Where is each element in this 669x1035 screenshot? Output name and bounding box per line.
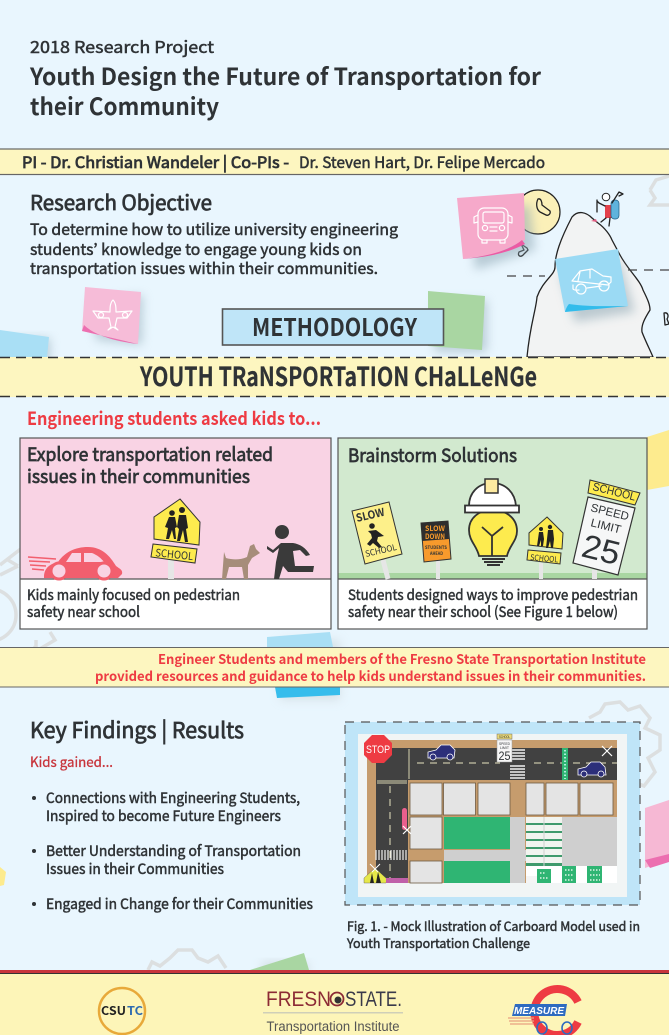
icon: speed sign: SCHOOL (499, 735, 510, 739)
list: key findings: Inspired to become Future Engineers (46, 805, 281, 826)
figure caption (346, 916, 640, 952)
decorative gears and sticky notes (0, 176, 669, 976)
icon: slow down sign: STUDENTS (425, 545, 447, 551)
list: key findings: Connections with Engineering Students, (46, 787, 300, 808)
icon: running child (267, 525, 314, 579)
figure: model map (345, 722, 640, 905)
icon: plane (93, 300, 132, 330)
icon: lightbulb with hard hat (465, 479, 519, 565)
banner: youth transportation challenge: YOUTH TRaNSPORTaTION CHaLLeNGe (139, 357, 537, 394)
list: key findings: Better Understanding of Transportation (46, 840, 301, 861)
icon: red car (28, 547, 122, 579)
panel caption (348, 584, 638, 622)
icon: speed limit sign: LIMIT (589, 517, 622, 536)
icon: car (572, 269, 611, 294)
logo: Fresno State: Transportation Institute (266, 1019, 400, 1034)
title (29, 58, 542, 122)
figure caption: Fig. 1. - Mock Illustration of Carboard Model used in (347, 916, 640, 935)
band: support note: Engineer Students and members of the Fresno State Transportation Institute (158, 648, 646, 668)
logo: Fresno State: FRESN (266, 988, 331, 1011)
icon: crossing sign (364, 864, 408, 883)
icon: stop sign: STOP (366, 744, 390, 756)
panel: explore (20, 438, 331, 629)
text: research objective: students’ knowledge to engage young kids on (30, 238, 362, 260)
heading: engineering students asked: Engineering students asked kids to... (27, 405, 321, 431)
text: research objective: transportation issues within their communities. (30, 257, 378, 279)
list: key findings: Issues in their Communities (46, 858, 224, 879)
list: key findings (32, 787, 313, 914)
icon: navy car (428, 745, 455, 760)
icon: speed sign: LIMIT (500, 746, 510, 750)
icon: school crossing sign: SCHOOL (155, 545, 194, 564)
sticky note: plane (82, 287, 143, 345)
panel heading (27, 441, 273, 489)
heading: key findings: Key Findings | Results (30, 713, 244, 745)
logo: CSUTC (99, 988, 145, 1034)
icon: speed limit sign: SPEED (589, 502, 630, 523)
heading: research objective: Research Objective (30, 186, 212, 216)
icon: dog (222, 544, 260, 579)
title: Youth Design the Future of Transportation for (29, 58, 542, 92)
illustration: mountain with climber (507, 192, 669, 357)
icon: school crossing sign (151, 499, 200, 579)
logo: Fresno State: STATE. (345, 988, 402, 1011)
icon: slow down sign: DOWN (425, 531, 445, 542)
icon: slow school sign: SCHOOL (364, 541, 398, 560)
panel caption: safety near school (27, 601, 140, 622)
icon: slow down sign: SLOW (425, 523, 445, 534)
logo: CSUTC: TC (127, 1002, 143, 1019)
panel: brainstorm (338, 438, 647, 629)
logo: Measure C: MEASURE (514, 1005, 565, 1017)
panel heading: Explore transportation related (27, 441, 273, 467)
sticky note: car (555, 249, 635, 322)
icon: slow school sign: SLOW (354, 504, 386, 526)
banner: youth transportation challenge (0, 357, 669, 397)
icon: slow down sign: AHEAD (429, 551, 443, 557)
band: investigators: Dr. Steven Hart, Dr. Felipe Mercado (299, 151, 545, 173)
icon: speed limit sign: 25 (578, 527, 624, 572)
logo: Fresno State (263, 988, 403, 1034)
sticky note: blue left (0, 330, 50, 363)
footer (0, 970, 669, 1035)
icon: small school sign (527, 517, 563, 579)
title: their Community (30, 88, 219, 122)
methodology label: METHODOLOGY (252, 309, 418, 344)
logo: Measure C (508, 989, 578, 1035)
sticky note: bus (457, 193, 535, 270)
icon: speed limit sign: SCHOOL (591, 481, 637, 504)
icon: speed sign: SPEED (499, 742, 510, 746)
icon: speed sign (497, 734, 512, 763)
figure caption: Youth Transportation Challenge (346, 933, 530, 952)
panel caption: Students designed ways to improve pedestrian (348, 584, 638, 605)
icon: slow down sign (421, 521, 451, 579)
band: investigators (0, 149, 669, 174)
icon: bus (474, 208, 512, 243)
icon: stop sign (364, 735, 392, 763)
logo: CSUTC: CSU (101, 1002, 126, 1019)
text: research objective: To determine how to utilize university engineering (30, 218, 398, 240)
blocks (410, 783, 613, 883)
icon: small school sign: SCHOOL (530, 552, 559, 565)
illustration: moon and bird (516, 190, 560, 256)
panel caption: Kids mainly focused on pedestrian (27, 584, 240, 605)
list: key findings: Engaged in Change for their Communities (46, 893, 313, 914)
sticky note: green (428, 291, 487, 352)
panel caption: safety near their school (See Figure 1 below) (348, 601, 618, 622)
icon: speed limit sign (573, 480, 640, 579)
heading: project year: 2018 Research Project (30, 34, 214, 58)
icon: navy car (578, 762, 606, 777)
crosswalks (376, 748, 568, 860)
panel caption (27, 584, 240, 622)
band: investigators: PI - Dr. Christian Wandeler | Co-PIs - (22, 151, 289, 173)
band: support note (0, 648, 669, 687)
icon: speed sign: 25 (498, 749, 511, 763)
subheading: kids gained: Kids gained... (30, 752, 113, 772)
band: support note: provided resources and guidance to help kids understand issues in their communities. (95, 665, 646, 685)
icon: climber (591, 192, 623, 226)
panel heading: Brainstorm Solutions (348, 442, 517, 468)
icon: slow school sign (352, 502, 402, 579)
panel heading: issues in their communities (27, 463, 250, 489)
text: research objective (30, 218, 398, 279)
